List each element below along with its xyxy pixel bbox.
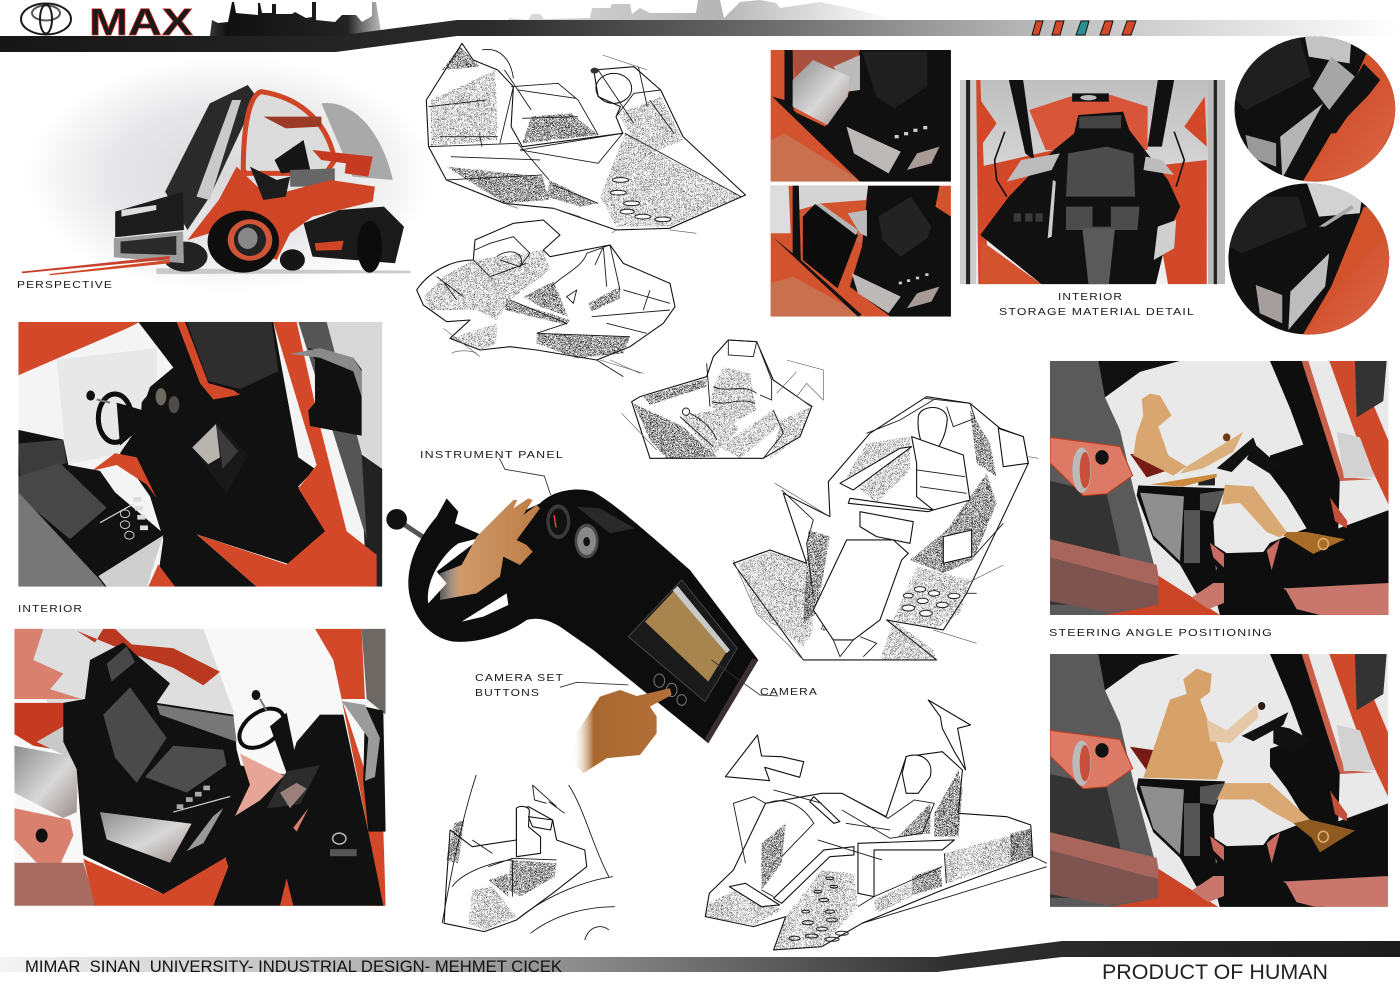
band	[0, 20, 1400, 52]
rotation arrow up	[928, 700, 970, 770]
sketch: cockpit floor	[417, 220, 675, 377]
panel: interior view 2	[14, 629, 386, 906]
label: PERSPECTIVE	[17, 279, 113, 291]
panel: interior view 1	[18, 322, 382, 587]
panel: storage open	[771, 186, 951, 317]
credit text: MIMAR SINAN UNIVERSITY- INDUSTRIAL DESIGN- MEHMET CICEK	[25, 957, 563, 976]
panel: steering angle low	[1050, 361, 1389, 615]
product of human: PRODUCT OF HUMAN	[1102, 961, 1328, 984]
panel: storage top	[771, 50, 951, 182]
toyota logo	[21, 4, 71, 34]
label: storage material detail: STORAGE MATERIAL DETAIL	[999, 306, 1195, 318]
panel: circular detail bottom	[1227, 183, 1390, 336]
label: interior: INTERIOR	[18, 603, 83, 615]
steering wheel	[1242, 712, 1304, 746]
skyline silhouette	[504, 0, 895, 22]
forklift	[21, 85, 411, 275]
sketch: seat	[600, 340, 823, 458]
console body	[408, 489, 758, 743]
sketch: cab overview	[426, 43, 745, 233]
dash screen	[267, 765, 320, 808]
hand on panel	[440, 498, 540, 600]
panel: perspective	[17, 57, 435, 293]
figure	[1143, 668, 1355, 852]
sketch: driver front view	[733, 397, 1038, 660]
steering wheel	[1216, 437, 1270, 474]
rotation arrow left	[725, 735, 804, 781]
band	[0, 941, 1400, 972]
panel: instrument panel	[386, 458, 778, 773]
max logo: MAX	[89, 2, 194, 44]
glow backdrop	[25, 57, 435, 293]
gauges	[546, 504, 570, 539]
sketch: small side view	[442, 775, 615, 940]
panel: circular detail top	[1233, 35, 1396, 183]
label: camera: CAMERA	[760, 686, 818, 698]
panel: seat front view	[960, 80, 1225, 284]
camera screen	[628, 580, 737, 702]
panel: steering angle high	[1050, 654, 1389, 908]
label: interior: INTERIOR	[1058, 291, 1123, 303]
label: camera set: CAMERA SET	[475, 672, 564, 684]
stripes	[1032, 21, 1136, 35]
factory silhouette	[210, 2, 382, 36]
footer band	[0, 941, 1400, 984]
leader lines	[499, 458, 778, 696]
dash screen	[192, 424, 238, 469]
steering wheel	[86, 388, 180, 446]
header band	[0, 0, 1400, 52]
label: steering angle positioning: STEERING ANGLE POSITIONING	[1049, 627, 1273, 639]
sketch: driver side view	[705, 700, 1047, 950]
knob	[386, 509, 425, 538]
label: instrument panel: INSTRUMENT PANEL	[420, 449, 564, 461]
label: buttons: BUTTONS	[475, 687, 540, 699]
figure	[1133, 394, 1345, 554]
camera buttons	[654, 674, 686, 705]
steering wheel	[234, 690, 297, 773]
hand pressing button	[572, 688, 672, 773]
